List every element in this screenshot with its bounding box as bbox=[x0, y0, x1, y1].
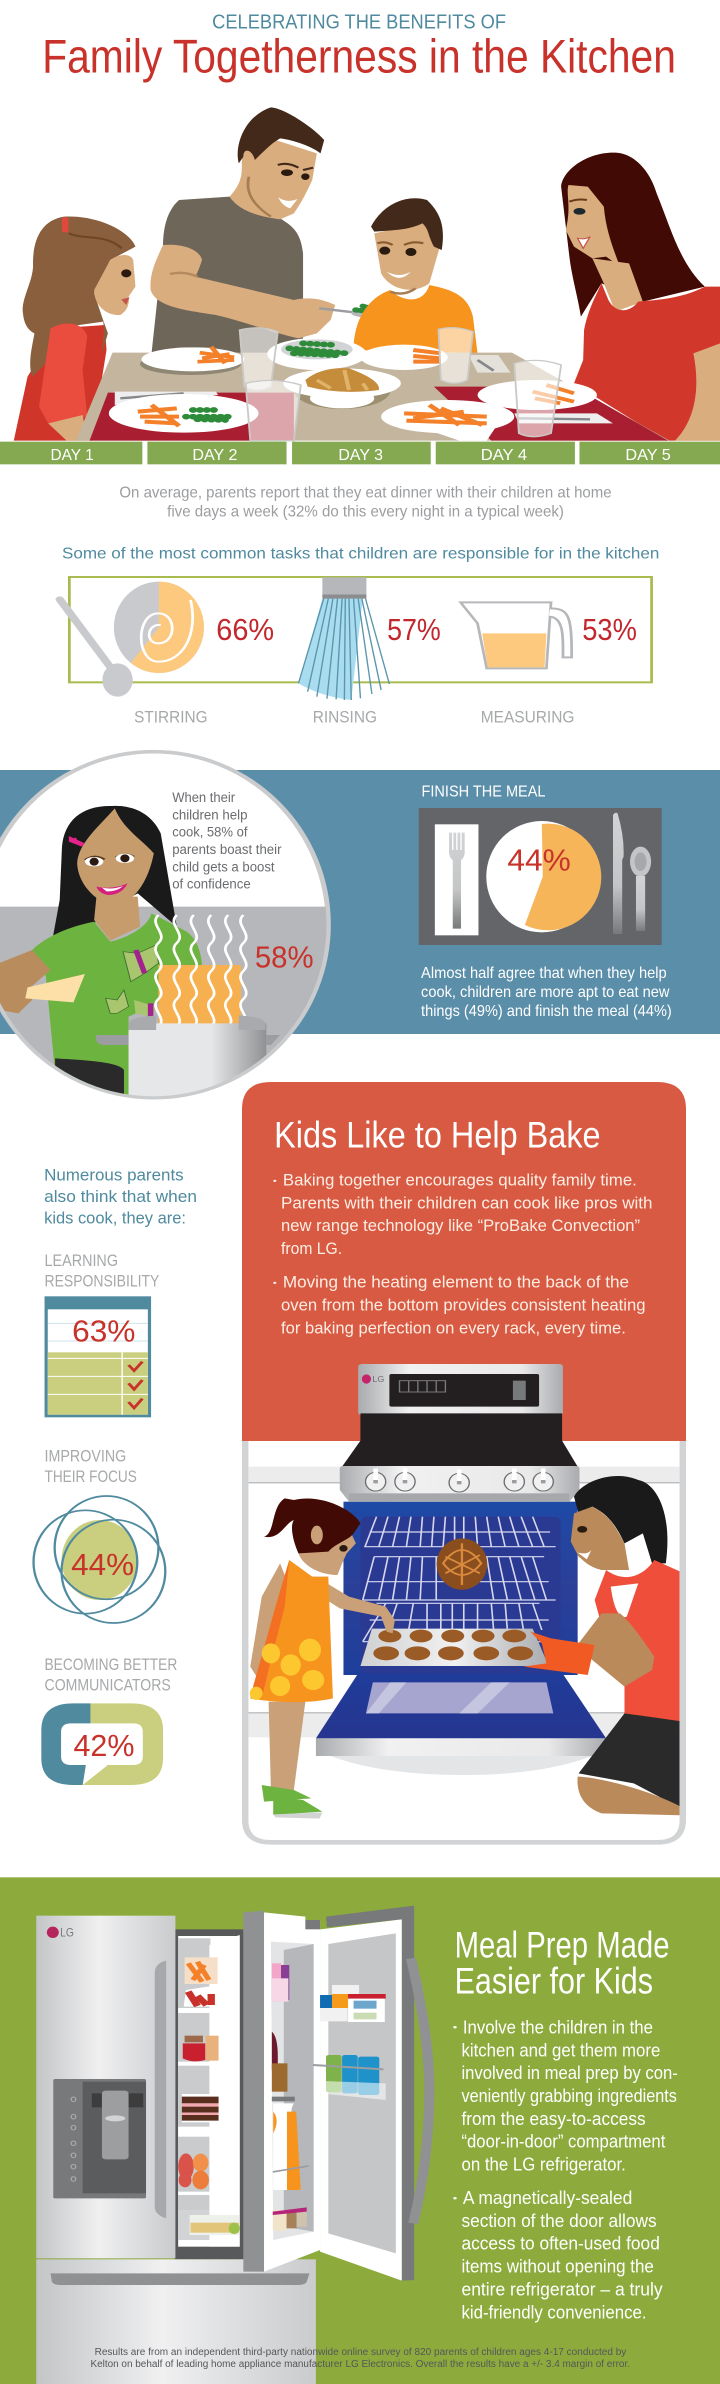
oven body bbox=[316, 1413, 606, 1775]
day strip bbox=[0, 442, 720, 464]
confidence text: When their bbox=[172, 790, 235, 805]
illustration: mom bbox=[561, 153, 720, 441]
section: title and family dinner bbox=[0, 10, 720, 464]
label: becoming better communicators: COMMUNICATORS bbox=[45, 1676, 171, 1694]
meal prep bullets bbox=[453, 2017, 678, 2322]
section: meal prep bbox=[0, 1877, 720, 2384]
stat: rinsing: 57% bbox=[387, 613, 441, 647]
label: becoming better communicators bbox=[45, 1656, 177, 1694]
heading: finish the meal: FINISH THE MEAL bbox=[422, 783, 546, 800]
drinking glasses bbox=[240, 328, 561, 441]
confidence text: children help bbox=[172, 807, 247, 823]
meal prep bullets: • bbox=[453, 2023, 457, 2033]
section: common kitchen tasks bbox=[60, 483, 659, 727]
place setting bbox=[419, 808, 662, 945]
fridge handle bbox=[411, 1958, 429, 2223]
oven and bakers bbox=[248, 1413, 684, 1819]
intro text: kids cook, they are: bbox=[44, 1209, 186, 1227]
icon: measuring cup bbox=[461, 602, 572, 668]
dinner stat text bbox=[119, 483, 612, 520]
stat: 44 percent: 44% bbox=[507, 843, 571, 877]
middle door bbox=[243, 1911, 320, 2272]
section: parents also think bbox=[34, 1167, 197, 1785]
icon: faucet spray bbox=[298, 577, 389, 700]
label: learning responsibility: RESPONSIBILITY bbox=[45, 1273, 159, 1291]
stat: 44 percent focus: 44% bbox=[71, 1548, 134, 1582]
blue band bbox=[0, 770, 720, 1034]
illustration: boy bbox=[354, 198, 478, 353]
confidence text bbox=[172, 790, 282, 892]
bullet points: • bbox=[273, 1279, 277, 1288]
task labels bbox=[134, 709, 574, 727]
illustration: pot with steam bbox=[96, 915, 280, 1100]
stat: stirring: 66% bbox=[216, 613, 274, 647]
confidence text: child gets a boost bbox=[172, 859, 275, 875]
task labels: STIRRING bbox=[134, 709, 208, 727]
label: improving their focus: IMPROVING bbox=[45, 1448, 126, 1466]
intro text: Numerous parents bbox=[44, 1167, 184, 1185]
bullet points: • bbox=[273, 1177, 277, 1186]
right door bbox=[313, 1906, 414, 2281]
kitchen frame bbox=[245, 1441, 683, 1842]
illustration: cooking girl bbox=[0, 806, 202, 1100]
LG logo bbox=[47, 1926, 74, 1940]
cookie tray bbox=[360, 1629, 549, 1666]
table with placemats bbox=[76, 353, 669, 441]
icon: checklist bbox=[45, 1296, 151, 1417]
subtitle: CELEBRATING THE BENEFITS OF bbox=[212, 10, 506, 33]
bullet points: from LG. bbox=[281, 1240, 342, 1258]
finish the meal text bbox=[421, 964, 672, 1019]
stat: 42 percent: 42% bbox=[73, 1729, 135, 1763]
meal prep bullets: A magnetically-sealed bbox=[463, 2187, 632, 2208]
stat: 58 percent: 58% bbox=[255, 940, 314, 974]
day strip: DAY 2 bbox=[192, 446, 237, 463]
icon: spoon and stirred bowl bbox=[60, 582, 204, 697]
meal prep bullets: on the LG refrigerator. bbox=[461, 2154, 626, 2175]
day strip: DAY 3 bbox=[338, 446, 383, 463]
confidence text: cook, 58% of bbox=[172, 824, 248, 840]
card text bbox=[273, 1114, 652, 1447]
label: learning responsibility bbox=[45, 1252, 159, 1291]
label: learning responsibility: LEARNING bbox=[45, 1252, 118, 1270]
label: improving their focus bbox=[45, 1448, 137, 1486]
day strip: DAY 5 bbox=[625, 446, 671, 463]
oven backguard: LG bbox=[372, 1375, 384, 1384]
water dispenser bbox=[53, 2079, 146, 2198]
stat: measuring: 53% bbox=[582, 613, 637, 647]
green panel bbox=[0, 1877, 720, 2384]
panel: kids like to help bake bbox=[242, 1082, 686, 1842]
stat: 63 percent: 63% bbox=[72, 1314, 135, 1348]
illustration: girl baking bbox=[250, 1498, 395, 1819]
day strip: DAY 1 bbox=[51, 446, 94, 463]
LG logo: LG bbox=[60, 1926, 74, 1940]
day strip: DAY 4 bbox=[481, 446, 527, 463]
pie bbox=[437, 1538, 487, 1590]
dinner stat text: five days a week (32% do this every night in a typical week) bbox=[167, 503, 564, 520]
task labels: MEASURING bbox=[481, 709, 574, 727]
meal prep heading bbox=[455, 1923, 669, 2002]
oven racks bbox=[363, 1517, 556, 1642]
label: improving their focus: THEIR FOCUS bbox=[45, 1468, 137, 1486]
panel: finish the meal bbox=[419, 783, 672, 1019]
intro text bbox=[44, 1167, 197, 1227]
orange card bbox=[242, 1082, 686, 1441]
illustration: open refrigerator bbox=[36, 1906, 429, 2384]
illustration: girl bbox=[14, 217, 135, 441]
oven door bbox=[316, 1673, 606, 1738]
plates and food bbox=[109, 338, 597, 441]
illustration: dad bbox=[150, 107, 379, 353]
label: becoming better communicators: BECOMING BETTER bbox=[45, 1656, 177, 1674]
icon: speech bubble bbox=[41, 1703, 163, 1785]
interior shelves and food bbox=[178, 1957, 240, 2235]
confidence text: of confidence bbox=[172, 876, 251, 892]
fridge body bbox=[36, 1916, 316, 2384]
section: confidence and finish the meal bbox=[0, 752, 720, 1107]
meal prep bullets: • bbox=[453, 2194, 457, 2204]
intro text and checklist bbox=[44, 1167, 197, 1417]
illustration: mother baking bbox=[523, 1476, 684, 1815]
footnote bbox=[90, 2346, 630, 2369]
icon: venn rings bbox=[34, 1496, 165, 1623]
bullet points bbox=[273, 1171, 652, 1337]
task labels: RINSING bbox=[313, 709, 377, 727]
focus and communicators bbox=[34, 1448, 177, 1785]
intro text: also think that when bbox=[44, 1188, 197, 1206]
tasks box bbox=[69, 577, 652, 682]
confidence text: parents boast their bbox=[172, 842, 282, 857]
panel: confidence circle bbox=[0, 752, 344, 1107]
oven backguard bbox=[358, 1364, 563, 1447]
